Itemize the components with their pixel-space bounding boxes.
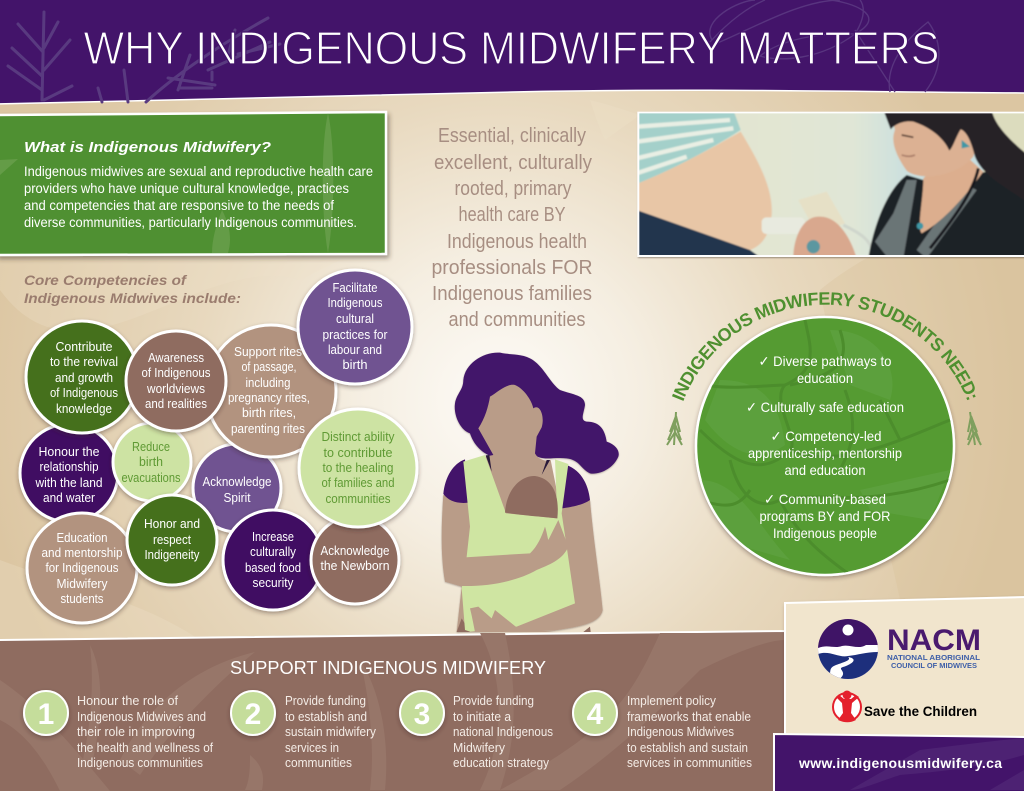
bubble: honour the land: Honour the	[38, 444, 100, 459]
step 1: Honour the role of	[77, 693, 178, 708]
sleeves	[443, 459, 590, 509]
bubble: awareness of worldviews: worldviews	[146, 381, 205, 396]
bubble: distinct ability: Distinct ability	[322, 429, 395, 444]
checklist	[746, 353, 904, 541]
hair	[455, 353, 619, 474]
bubble: honour the land: with the land	[35, 475, 102, 490]
bubble: distinct ability: of families and	[322, 475, 394, 490]
bubble: acknowledge spirit	[193, 444, 281, 532]
bubble: facilitate cultural practices: Indigenous	[328, 295, 383, 310]
strap shadows	[486, 455, 550, 475]
bubble: facilitate cultural practices: Facilitate	[332, 280, 378, 295]
step 3: national Indigenous	[453, 724, 553, 739]
Save the Children logo	[833, 690, 977, 722]
panel: partner logos	[785, 597, 1024, 740]
bubble: education and mentorship: Midwifery	[56, 576, 108, 591]
Save the Children logo: Save the Children	[864, 703, 977, 719]
central statement: rooted, primary	[454, 178, 572, 200]
bubble: acknowledge spirit: Spirit	[224, 490, 251, 505]
bubble: honor and respect	[127, 495, 217, 585]
checklist: ✓ Competency-led	[770, 428, 882, 444]
baby head	[505, 476, 558, 518]
step 1: their role in improving	[77, 724, 195, 739]
bubble: honour the land: and water	[43, 490, 96, 505]
bubble: increase food security: culturally	[250, 544, 296, 559]
checklist: apprenticeship, mentorship	[748, 445, 902, 461]
bubble: contribute to revival	[26, 321, 138, 433]
bubble: distinct ability: communities	[326, 491, 391, 506]
illustration: mother and baby	[442, 353, 619, 632]
bubble: reduce birth evacuations	[113, 423, 191, 501]
NACM logo: COUNCIL OF MIDWIVES	[891, 663, 977, 670]
bubble: honor and respect: Indigeneity	[144, 547, 200, 562]
checklist: programs BY and FOR	[760, 508, 890, 524]
arched heading: students need: INDIGENOUS MIDWIFERY STUDENTS NEED:	[672, 292, 976, 401]
central statement: and communities	[448, 309, 586, 331]
photo: midwife with pregnant client	[637, 110, 1024, 258]
website address: www.indigenousmidwifery.ca	[798, 755, 1002, 771]
central statement: professionals FOR	[432, 257, 592, 279]
bubble: distinct ability: to the healing	[322, 460, 394, 475]
forearm	[445, 520, 568, 586]
bubble: increase food security	[223, 510, 323, 610]
central statement: Indigenous health	[447, 231, 587, 253]
step 4: Indigenous Midwives	[627, 724, 734, 739]
bubble: facilitate cultural practices: cultural	[336, 311, 374, 326]
central statement: health care BY	[458, 204, 566, 226]
leaf outlines decoration	[710, 0, 939, 92]
bubble: honour the land	[20, 424, 118, 522]
fern decoration	[8, 12, 280, 102]
bubble: education and mentorship: for Indigenous	[46, 560, 119, 575]
step 1: Indigenous Midwives and	[77, 709, 206, 724]
bubble: education and mentorship: and mentorship	[42, 545, 122, 560]
title: WHY INDIGENOUS MIDWIFERY MATTERS	[84, 22, 940, 74]
step 1: 1	[38, 698, 54, 731]
bubble: reduce birth evacuations: evacuations	[122, 470, 181, 485]
body	[442, 495, 603, 632]
bubble: support rites of passage: including	[246, 375, 290, 390]
bubble: reduce birth evacuations: Reduce	[132, 439, 170, 454]
bubble: education and mentorship: Education	[56, 530, 108, 545]
bubble: facilitate cultural practices: practices for	[322, 327, 388, 342]
bubble: awareness of worldviews: Awareness	[148, 350, 204, 365]
step 2: to establish and	[285, 709, 367, 724]
description: diverse communities, particularly Indigenous communities.	[24, 215, 357, 230]
panel: what is Indigenous midwifery	[0, 112, 386, 255]
step 4: services in communities	[627, 755, 752, 770]
central statement: Indigenous families	[432, 283, 592, 305]
step 4: Implement policy	[627, 693, 716, 708]
step 2	[231, 691, 376, 770]
bubble: awareness of worldviews: of Indigenous	[142, 365, 211, 380]
bubble: honor and respect: Honor and	[144, 516, 200, 531]
checklist: ✓ Culturally safe education	[746, 399, 904, 415]
central statement	[432, 125, 592, 331]
bubble: distinct ability	[299, 409, 417, 527]
website bar	[774, 734, 1024, 791]
description: and competencies that are responsive to the needs of	[24, 198, 334, 213]
step 2: services in	[285, 740, 339, 755]
checklist: education	[797, 370, 853, 386]
step 4: to establish and sustain	[627, 740, 748, 755]
bubble: awareness of worldviews: and realities	[145, 396, 207, 411]
bubble: reduce birth evacuations: birth	[139, 454, 163, 469]
bubble: contribute to revival: and growth	[55, 370, 113, 385]
step 4: frameworks that enable	[627, 709, 751, 724]
step 4: 4	[587, 698, 604, 731]
description: providers who have unique cultural knowledge, practices	[24, 181, 349, 196]
icon: left pine sprig	[667, 412, 682, 445]
sling	[462, 455, 575, 632]
bubble: contribute to revival: knowledge	[56, 401, 112, 416]
step 2: communities	[285, 755, 352, 770]
step 2: 2	[245, 698, 261, 731]
bubble: awareness of worldviews	[126, 331, 226, 431]
bubble: support rites of passage: birth rites,	[242, 405, 296, 420]
bubble: contribute to revival: Contribute	[56, 339, 112, 354]
heading: What is Indigenous Midwifery?	[24, 139, 271, 156]
bubble: distinct ability: to contribute	[324, 445, 392, 460]
panel: support Indigenous midwifery	[0, 631, 790, 791]
bubble: acknowledge the newborn	[311, 516, 399, 604]
step 3: education strategy	[453, 755, 549, 770]
checklist: and education	[784, 462, 866, 478]
step 3	[400, 691, 553, 770]
NACM logo	[818, 619, 981, 680]
step 1: the health and wellness of	[77, 740, 213, 755]
NACM logo: NATIONAL ABORIGINAL	[887, 655, 981, 662]
bubble: increase food security: based food	[245, 560, 301, 575]
core competencies heading: Core Competencies of	[24, 272, 187, 288]
NACM logo: NACM	[887, 624, 981, 657]
step 2: Provide funding	[285, 693, 366, 708]
bubble: contribute to revival: to the revival	[50, 354, 118, 369]
bubble: acknowledge spirit: Acknowledge	[202, 474, 272, 489]
checklist: ✓ Community-based	[764, 491, 886, 507]
bubble: acknowledge the newborn: Acknowledge	[320, 543, 390, 558]
bubble: facilitate cultural practices: birth	[342, 357, 368, 372]
bubble: support rites of passage: pregnancy rites,	[228, 390, 310, 405]
description: Indigenous midwives are sexual and reproductive health care	[24, 164, 373, 179]
panel: students need circle	[696, 317, 954, 575]
step 3: to initiate a	[453, 709, 512, 724]
bubble: increase food security: security	[252, 575, 294, 590]
bubble: education and mentorship: students	[60, 591, 104, 606]
icon: right pine sprig	[968, 412, 981, 445]
bubble: honour the land: relationship	[40, 459, 98, 474]
central statement: Essential, clinically	[438, 125, 586, 147]
central statement: excellent, culturally	[434, 152, 592, 174]
step 3: Provide funding	[453, 693, 534, 708]
neck and face	[478, 385, 560, 507]
step 1: Indigenous communities	[77, 755, 203, 770]
checklist: ✓ Diverse pathways to	[758, 353, 892, 369]
bubble: education and mentorship	[27, 513, 137, 623]
step 3: 3	[414, 698, 430, 731]
competency bubbles	[20, 270, 417, 623]
bubble: honor and respect: respect	[153, 532, 191, 547]
step 3: Midwifery	[453, 740, 505, 755]
heading: SUPPORT INDIGENOUS MIDWIFERY	[230, 658, 546, 678]
step 1	[24, 691, 213, 770]
header banner	[0, 0, 1024, 104]
bubble: support rites of passage	[206, 325, 336, 457]
bubble: contribute to revival: of Indigenous	[50, 385, 118, 400]
bubble: facilitate cultural practices	[298, 270, 412, 384]
bubble: acknowledge the newborn: the Newborn	[320, 558, 390, 573]
lower hand	[470, 607, 553, 632]
checklist: Indigenous people	[773, 525, 877, 541]
core competencies heading	[24, 272, 241, 306]
description	[24, 164, 373, 230]
bubble: support rites of passage: of passage,	[242, 359, 296, 374]
step 4	[573, 691, 752, 770]
bubble: support rites of passage: parenting rites	[231, 421, 305, 436]
step 2: sustain midwifery	[285, 724, 376, 739]
bubble: increase food security: Increase	[252, 529, 294, 544]
bubble: facilitate cultural practices: labour and	[328, 342, 382, 357]
core competencies heading: Indigenous Midwives include:	[24, 290, 241, 306]
bubble: support rites of passage: Support rites	[234, 344, 302, 359]
